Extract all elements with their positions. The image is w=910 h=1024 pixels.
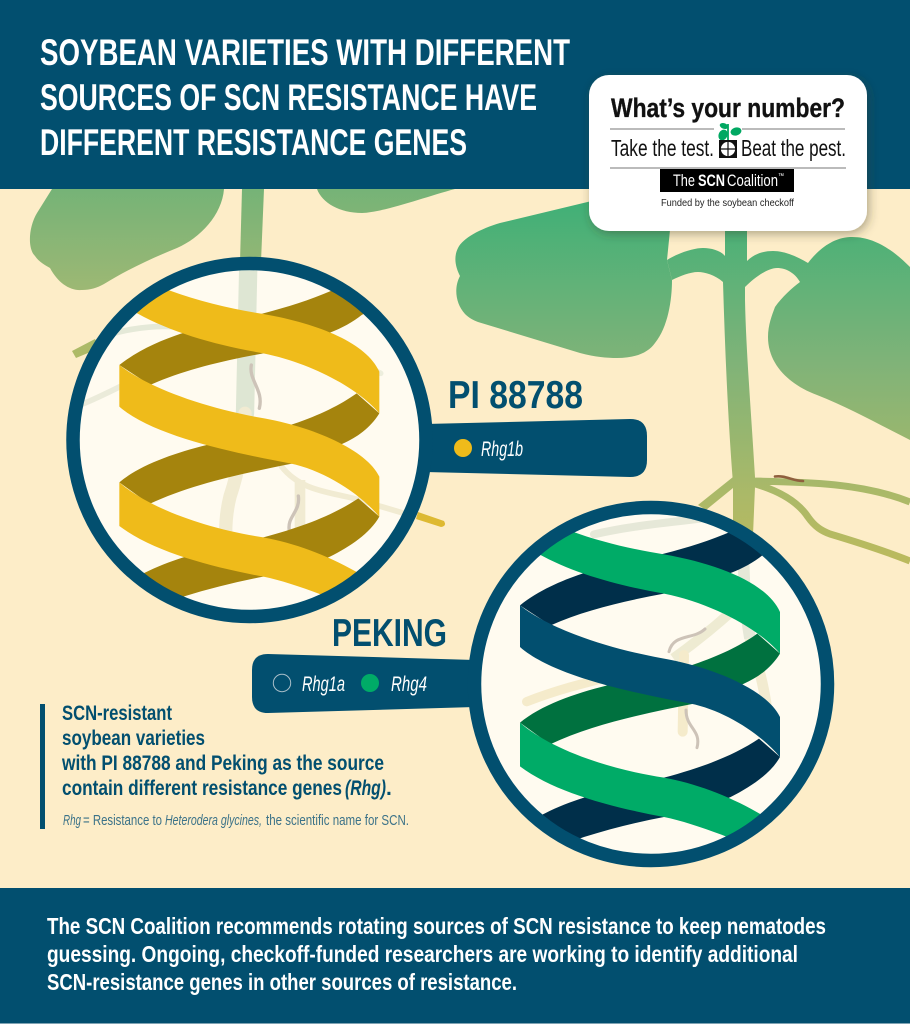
- badge: The SCN Coalition: [660, 169, 794, 192]
- text block: explanation: with PI 88788 and Peking as the source: [61, 752, 384, 775]
- logo card: Funded by the soybean checkoff: [661, 197, 794, 209]
- title: [40, 32, 570, 163]
- label: Rhg4: Rhg4: [391, 673, 427, 696]
- heading: PI 88788: PI 88788: [448, 374, 583, 417]
- logo card: [589, 75, 867, 231]
- badge: The SCN Coalition: ™: [778, 173, 784, 180]
- magnifier: PI 88788 helix: [73, 263, 427, 616]
- badge: The SCN Coalition: The: [673, 172, 695, 190]
- magnifier handle: PI 88788: [425, 419, 647, 477]
- icon: nematode on root: [775, 476, 803, 481]
- text block: explanation: (Rhg): [345, 777, 386, 800]
- plant: left leaves and stem: [30, 189, 455, 527]
- icon: nematodes: [669, 629, 705, 652]
- badge: The SCN Coalition: Coalition: [727, 172, 778, 190]
- icon: Rhg1a dot: [273, 674, 291, 692]
- logo card: Take the test.: [611, 135, 714, 161]
- text block: explanation: the scientific name for SCN.: [266, 812, 409, 829]
- icon: nematodes: [251, 365, 260, 408]
- text block: explanation: .: [386, 777, 392, 800]
- icon: seedling and crosshair: [717, 122, 742, 158]
- pale plant inside lens: [527, 518, 768, 748]
- magnifier handle: Peking: [252, 654, 475, 713]
- text block: explanation: Rhg: [63, 812, 81, 829]
- title: DIFFERENT RESISTANCE GENES: [40, 122, 467, 163]
- logo card: Beat the pest.: [741, 135, 846, 161]
- badge: The SCN Coalition: SCN: [698, 172, 725, 190]
- label: Rhg1b: Rhg1b: [481, 438, 523, 461]
- footer text: SCN-resistance genes in other sources of resistance.: [47, 969, 517, 995]
- label: Rhg1a: Rhg1a: [302, 673, 345, 696]
- icon: Rhg4 dot: [361, 674, 379, 692]
- header band: [0, 0, 910, 189]
- footer band: [0, 888, 910, 1024]
- heading: Peking: PEKING: [332, 612, 447, 655]
- text block: explanation: = Resistance to: [83, 812, 162, 829]
- text block: explanation: SCN-resistant: [62, 702, 172, 725]
- pale plant inside lens: [83, 270, 404, 532]
- footer text: [47, 913, 826, 995]
- text block: explanation: soybean varieties: [62, 727, 205, 750]
- plant: right leaves, stem and roots: [455, 199, 910, 561]
- title: SOURCES OF SCN RESISTANCE HAVE: [40, 77, 537, 118]
- title: SOYBEAN VARIETIES WITH DIFFERENT: [40, 32, 570, 73]
- logo card: What’s your number?: [611, 93, 845, 123]
- text block: explanation: [40, 702, 409, 829]
- text block: explanation: contain different resistance genes: [62, 777, 342, 800]
- magnifier: Peking helix: [474, 508, 828, 860]
- text block: explanation: Heterodera glycines,: [165, 812, 262, 829]
- icon: Rhg1b dot: [454, 439, 472, 457]
